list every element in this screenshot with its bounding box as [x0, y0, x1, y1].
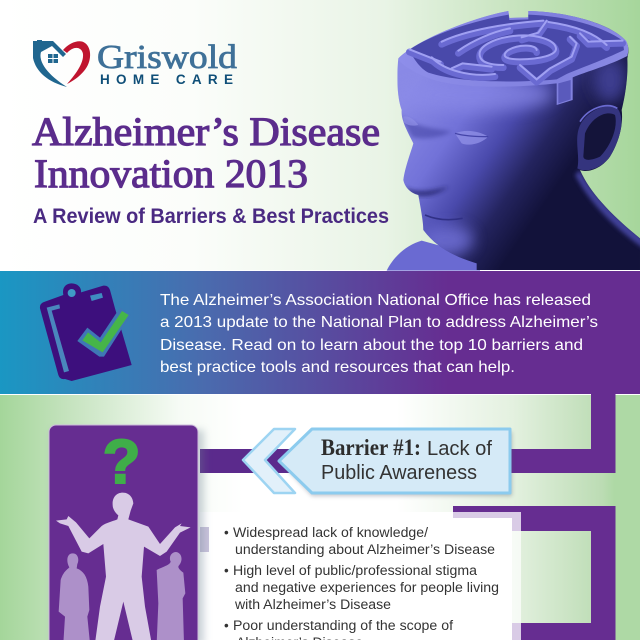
- card shadow: [52, 430, 204, 640]
- bullet list: with Alzheimer’s Disease: [234, 597, 391, 612]
- icon: question mark: ?: [103, 428, 140, 497]
- bullet list: Widespread lack of knowledge/: [233, 525, 428, 540]
- bullet list: Poor understanding of the scope of: [233, 618, 453, 633]
- lower background: [0, 395, 640, 640]
- maze connector lower right: [453, 506, 616, 640]
- callout: barrier 1: Public Awareness: [321, 462, 477, 484]
- maze connector upper right: [510, 394, 616, 473]
- intro text: Disease. Read on to learn about the top 10 barriers and: [160, 337, 583, 354]
- callout shadow: [281, 432, 512, 496]
- right person: [157, 552, 185, 640]
- ear: [577, 106, 621, 170]
- title: [32, 109, 380, 196]
- head shape: [397, 11, 640, 270]
- icon: clipboard with check: [40, 283, 132, 381]
- header background: [0, 0, 640, 270]
- intro text: The Alzheimer’s Association National Office has released: [160, 292, 591, 309]
- bullet list: •: [224, 618, 229, 633]
- intro text: a 2013 update to the National Plan to address Alzheimer’s: [160, 314, 598, 331]
- title: Alzheimer’s Disease: [32, 109, 380, 154]
- maze top: [398, 11, 628, 105]
- callout heading: Barrier #1:: [321, 435, 421, 460]
- panel: purple figure card: [49, 425, 198, 640]
- intro text: [160, 292, 598, 376]
- callout: barrier 1: [279, 429, 510, 493]
- panel: barrier details: [200, 512, 521, 640]
- intro band: [0, 271, 640, 394]
- title: Innovation 2013: [34, 151, 308, 196]
- callout: barrier 1: Lack of: [427, 438, 492, 460]
- intro text: best practice tools and resources that can help.: [160, 359, 515, 376]
- shoulder: [387, 241, 480, 271]
- silhouettes: [56, 493, 191, 640]
- bullet list: and negative experiences for people living: [235, 580, 499, 595]
- logo: Griswold Home Care: [33, 39, 237, 87]
- bullet list: High level of public/professional stigma: [233, 563, 478, 578]
- bullet list: •: [224, 563, 229, 578]
- bullet list: •: [224, 525, 229, 540]
- subtitle: A Review of Barriers & Best Practices: [33, 205, 389, 228]
- left person: [59, 553, 90, 640]
- bullet list: understanding about Alzheimer’s Disease: [235, 542, 495, 557]
- icon: house heart: [33, 40, 90, 87]
- main person: [56, 493, 191, 640]
- logo wordmark: Griswold: [97, 39, 237, 76]
- logo tagline: HOME CARE: [100, 72, 233, 87]
- chevron arrow: [243, 429, 295, 493]
- connector left: [200, 449, 295, 473]
- illustration: head with maze: [380, 0, 640, 271]
- bullet list: [224, 525, 499, 640]
